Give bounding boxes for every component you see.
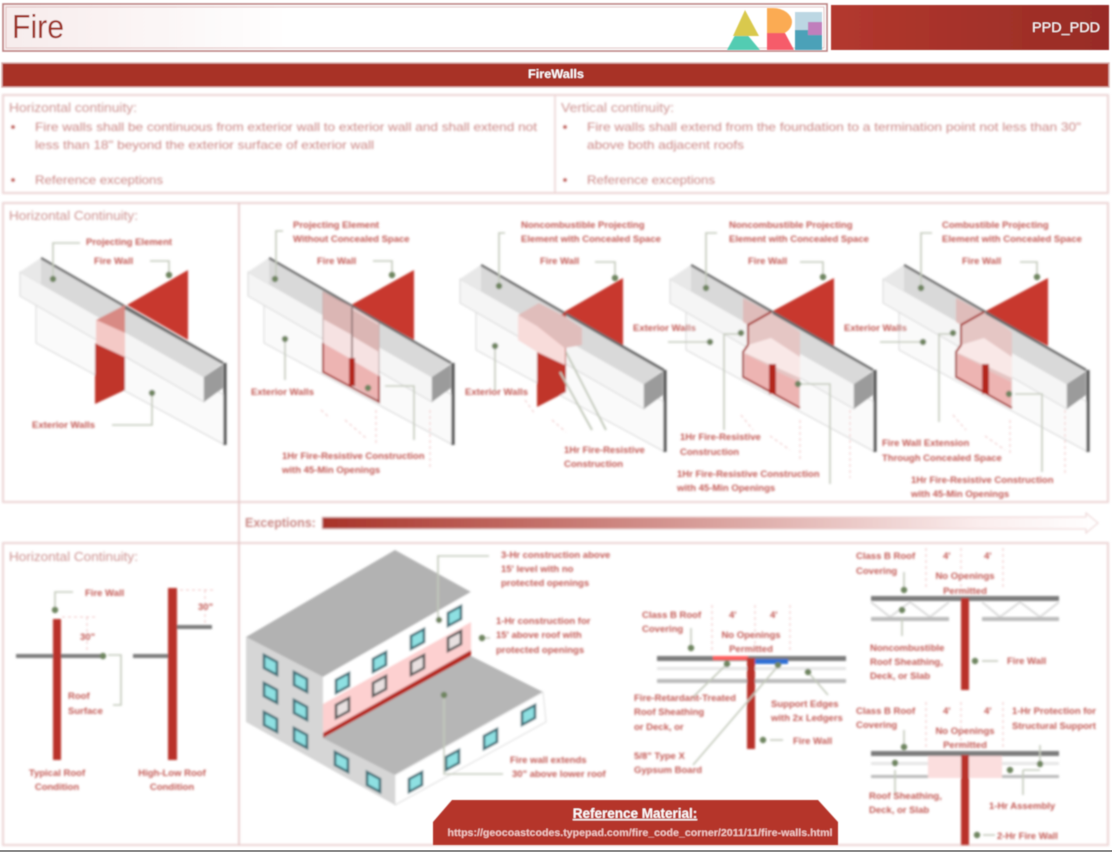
- banner: reference material: https://geocoastcodes.typepad.com/fire_code_corner/2011/11/fire-walls.html: [448, 827, 833, 839]
- diagram: noncombustible projecting element with concealed space: [460, 220, 665, 470]
- labels: Class B Roof: [642, 610, 702, 621]
- labels: Roof Sheathing: [634, 707, 704, 718]
- horizontal continuity text: [9, 101, 538, 187]
- logo: ARE: [727, 8, 822, 50]
- vertical continuity text: Reference exceptions: [587, 173, 715, 187]
- labels: 1-Hr construction for: [496, 616, 591, 627]
- labels: with 45-Min Openings: [281, 465, 380, 476]
- high-low roof condition: Condition: [150, 782, 194, 793]
- typical roof condition: Surface: [68, 706, 103, 717]
- labels: [856, 706, 1097, 842]
- diagram: combustible projecting element with concealed space: [844, 220, 1088, 500]
- labels: protected openings: [501, 578, 589, 589]
- labels: [844, 220, 1082, 500]
- labels: 1Hr Fire-Resistive Construction: [677, 469, 820, 480]
- typical roof condition: Condition: [35, 782, 79, 793]
- labels: Covering: [642, 624, 683, 635]
- labels: Covering: [856, 720, 897, 731]
- labels: [251, 220, 425, 476]
- labels: 4': [984, 551, 992, 562]
- labels: Construction: [680, 447, 739, 458]
- labels: Roof Sheathing,: [870, 657, 943, 668]
- typical roof condition: 30": [80, 632, 95, 643]
- detail: class B roof covering with fire-retardant treatment: [634, 605, 846, 776]
- labels: or Deck, or: [634, 722, 684, 733]
- labels: [465, 220, 661, 470]
- labels: Roof Sheathing,: [869, 791, 942, 802]
- labels: [856, 551, 1046, 682]
- exceptions arrow: Exceptions:: [245, 516, 316, 530]
- labels: Exterior Walls: [32, 420, 95, 431]
- typical roof condition: Roof: [68, 691, 90, 702]
- labels: Through Concealed Space: [882, 453, 1002, 464]
- labels: Projecting Element: [293, 220, 380, 231]
- labels: Permitted: [729, 644, 773, 655]
- title: Fire: [12, 8, 64, 45]
- panel frames: diagrams: [3, 203, 1108, 845]
- detail: 1-hr protection for structural support: [856, 702, 1097, 845]
- horizontal continuity text: Fire walls shall be continuous from exterior wall to exterior wall and shall extend not: [35, 120, 538, 134]
- labels: 15' level with no: [501, 564, 574, 575]
- detail: noncombustible roof sheathing: [856, 548, 1059, 690]
- labels: Covering: [856, 566, 897, 577]
- labels: 1Hr Fire-Resistive Construction: [911, 475, 1054, 486]
- labels: [634, 610, 843, 776]
- labels: Fire wall extends: [510, 755, 587, 766]
- high-low roof condition: 30": [198, 602, 213, 613]
- vertical continuity text: Vertical continuity:: [561, 101, 674, 115]
- labels: with 45-Min Openings: [910, 489, 1009, 500]
- labels: Fire Wall Extension: [882, 438, 969, 449]
- exceptions arrow: [245, 513, 1098, 533]
- labels: Without Concealed Space: [293, 234, 410, 245]
- labels: 15' above roof with: [496, 630, 582, 641]
- labels: 1Hr Fire-Resistive: [680, 432, 761, 443]
- labels: Fire Wall: [94, 256, 133, 267]
- diagram: noncombustible with 1hr construction: [633, 220, 875, 494]
- heading: horizontal continuity: Horizontal Continuity:: [9, 209, 138, 223]
- tag: PPD_PDD: [831, 5, 1109, 50]
- labels: Noncombustible: [870, 643, 944, 654]
- heading: horizontal continuity lower: Horizontal Continuity:: [9, 550, 138, 564]
- labels: with 45-Min Openings: [676, 483, 775, 494]
- header bar: [3, 4, 827, 51]
- labels: [32, 237, 173, 431]
- tag: PPD_PDD: PPD_PDD: [1032, 19, 1100, 35]
- labels: Fire-Retardant-Treated: [634, 693, 736, 704]
- labels: Exterior Walls: [251, 387, 314, 398]
- horizontal continuity text: less than 18" beyond the exterior surface of exterior wall: [35, 138, 374, 152]
- labels: 1-Hr Protection for: [1012, 706, 1096, 717]
- vertical continuity text: [561, 101, 1081, 187]
- labels: 4': [770, 610, 778, 621]
- labels: Element with Concealed Space: [521, 234, 661, 245]
- labels: 4': [984, 706, 992, 717]
- section banner: FireWalls: FireWalls: [528, 67, 584, 81]
- labels: Deck, or Slab: [870, 671, 930, 682]
- labels: [496, 550, 610, 780]
- labels: Construction: [564, 459, 623, 470]
- typical roof condition: Typical Roof: [29, 768, 86, 779]
- typical roof condition: [16, 588, 124, 793]
- banner: reference material: [433, 800, 838, 845]
- vertical continuity text: Fire walls shall extend from the foundation to a termination point not less than 30": [587, 120, 1081, 134]
- horizontal continuity text: Horizontal continuity:: [9, 101, 137, 115]
- windows: [264, 606, 535, 792]
- labels: [633, 220, 869, 494]
- section banner: FireWalls: [2, 63, 1109, 87]
- labels: Structural Support: [1012, 721, 1097, 732]
- labels: No Openings: [935, 571, 995, 582]
- diagram: base fire wall: [20, 237, 225, 445]
- labels: Deck, or Slab: [869, 805, 929, 816]
- high-low roof condition: High-Low Roof: [138, 768, 207, 779]
- labels: Fire Wall: [793, 736, 832, 747]
- labels: Class B Roof: [856, 551, 916, 562]
- labels: Permitted: [943, 740, 987, 751]
- labels: No Openings: [721, 630, 781, 641]
- labels: Fire Wall: [317, 256, 356, 267]
- labels: 1-Hr Assembly: [989, 801, 1056, 812]
- labels: Support Edges: [771, 699, 839, 710]
- labels: Combustible Projecting: [942, 220, 1049, 231]
- labels: 1Hr Fire-Resistive: [564, 445, 645, 456]
- diagram: isometric building: [246, 550, 610, 805]
- typical roof condition: Fire Wall: [85, 588, 124, 599]
- labels: 4': [943, 706, 951, 717]
- labels: Fire Wall: [1007, 656, 1046, 667]
- labels: Fire Wall: [540, 256, 579, 267]
- labels: 4': [729, 610, 737, 621]
- labels: Fire Wall: [962, 256, 1001, 267]
- labels: 5/8" Type X: [634, 751, 685, 762]
- labels: Exterior Walls: [465, 387, 528, 398]
- labels: Element with Concealed Space: [942, 234, 1082, 245]
- labels: Permitted: [943, 586, 987, 597]
- horizontal continuity text: Reference exceptions: [35, 173, 163, 187]
- high-low roof condition: [133, 588, 216, 793]
- labels: Element with Concealed Space: [729, 234, 869, 245]
- diagram: projecting element without concealed space: [248, 220, 453, 476]
- labels: with 2x Ledgers: [770, 713, 843, 724]
- labels: 3-Hr construction above: [501, 550, 610, 561]
- banner: reference material: Reference Material:: [573, 806, 697, 821]
- labels: Exterior Walls: [633, 323, 696, 334]
- labels: Gypsum Board: [634, 765, 702, 776]
- labels: 1Hr Fire-Resistive Construction: [282, 451, 425, 462]
- panel: requirements text: [3, 95, 1108, 193]
- diagram: roof conditions: [16, 588, 216, 793]
- labels: Class B Roof: [856, 706, 916, 717]
- labels: Noncombustible Projecting: [729, 220, 853, 231]
- labels: Noncombustible Projecting: [521, 220, 645, 231]
- labels: Fire Wall: [748, 256, 787, 267]
- labels: No Openings: [935, 726, 995, 737]
- labels: Exterior Walls: [844, 323, 907, 334]
- labels: 4': [943, 551, 951, 562]
- labels: Projecting Element: [86, 237, 173, 248]
- labels: 30" above lower roof: [512, 769, 607, 780]
- vertical continuity text: above both adjacent roofs: [587, 138, 744, 152]
- labels: 2-Hr Fire Wall: [997, 831, 1058, 842]
- labels: protected openings: [496, 645, 584, 656]
